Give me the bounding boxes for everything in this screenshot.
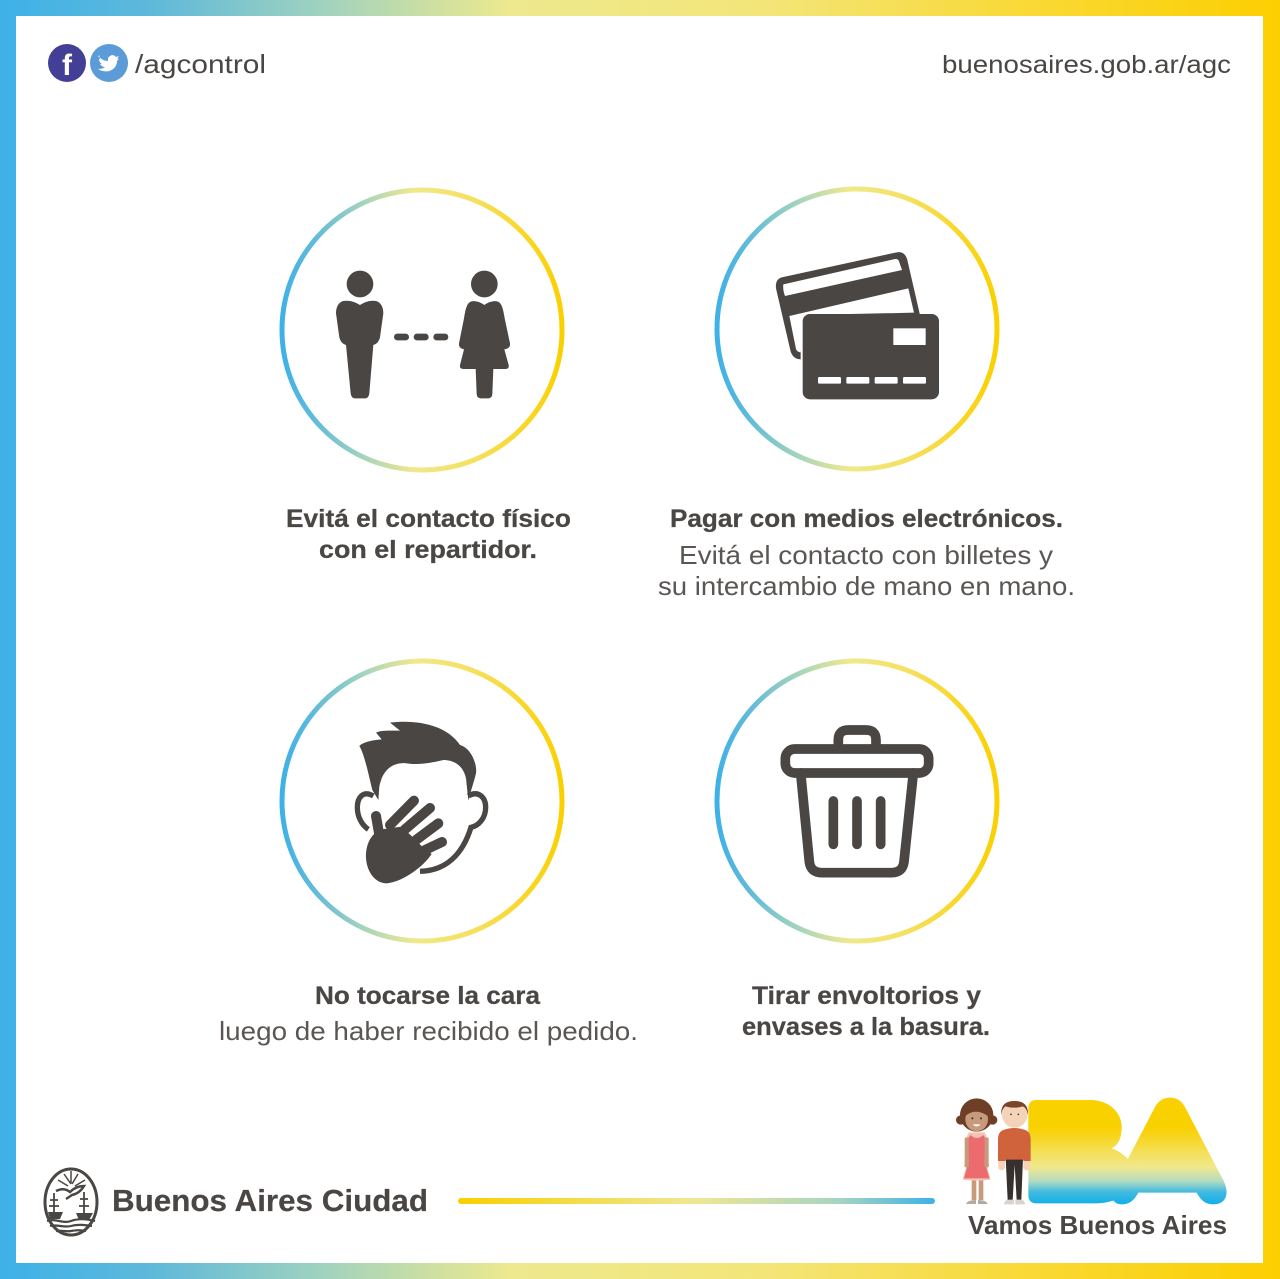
caption bbox=[742, 982, 990, 1041]
ring bbox=[717, 189, 997, 469]
ring bbox=[282, 190, 562, 470]
icon: hand covering face bbox=[357, 722, 486, 883]
wordmark: Buenos Aires Ciudad bbox=[112, 1183, 428, 1218]
girl figure bbox=[956, 1098, 997, 1204]
caption: No tocarse la cara bbox=[315, 982, 541, 1010]
caption bbox=[219, 982, 638, 1046]
caption: luego de haber recibido el pedido. bbox=[219, 1016, 638, 1046]
ring bbox=[282, 661, 562, 941]
caption: Evitá el contacto con billetes y bbox=[679, 540, 1053, 570]
caption bbox=[658, 505, 1075, 601]
caption bbox=[286, 505, 571, 564]
handle: /agcontrol bbox=[135, 49, 266, 79]
website: buenosaires.gob.ar/agc bbox=[942, 51, 1231, 79]
BA letters bbox=[1028, 1098, 1227, 1204]
caption: Evitá el contacto físico bbox=[286, 505, 571, 533]
caption: envases a la basura. bbox=[742, 1013, 990, 1041]
icon: twitter bbox=[90, 44, 128, 82]
caption: Pagar con medios electrónicos. bbox=[670, 505, 1063, 533]
icon: city crest bbox=[45, 1169, 97, 1235]
icon: cards bbox=[776, 252, 939, 399]
boy figure bbox=[998, 1101, 1031, 1204]
panel: face bbox=[219, 661, 638, 1046]
social header bbox=[48, 44, 266, 82]
gradient rule bbox=[458, 1198, 935, 1204]
logo: Vamos Buenos Aires bbox=[956, 1098, 1227, 1240]
caption: Tirar envoltorios y bbox=[752, 982, 981, 1010]
panel: contact bbox=[282, 190, 571, 564]
icon: facebook: f bbox=[62, 49, 73, 82]
logo: Buenos Aires Ciudad bbox=[45, 1169, 428, 1235]
icon: trash can bbox=[785, 730, 929, 873]
panel: trash bbox=[717, 661, 997, 1041]
tagline: Vamos Buenos Aires bbox=[968, 1210, 1227, 1240]
ring bbox=[717, 661, 997, 941]
icon: two people apart bbox=[336, 271, 510, 398]
panel: payment bbox=[658, 189, 1075, 601]
icon: facebook bbox=[48, 44, 86, 82]
caption: su intercambio de mano en mano. bbox=[658, 571, 1075, 601]
caption: con el repartidor. bbox=[319, 536, 537, 564]
